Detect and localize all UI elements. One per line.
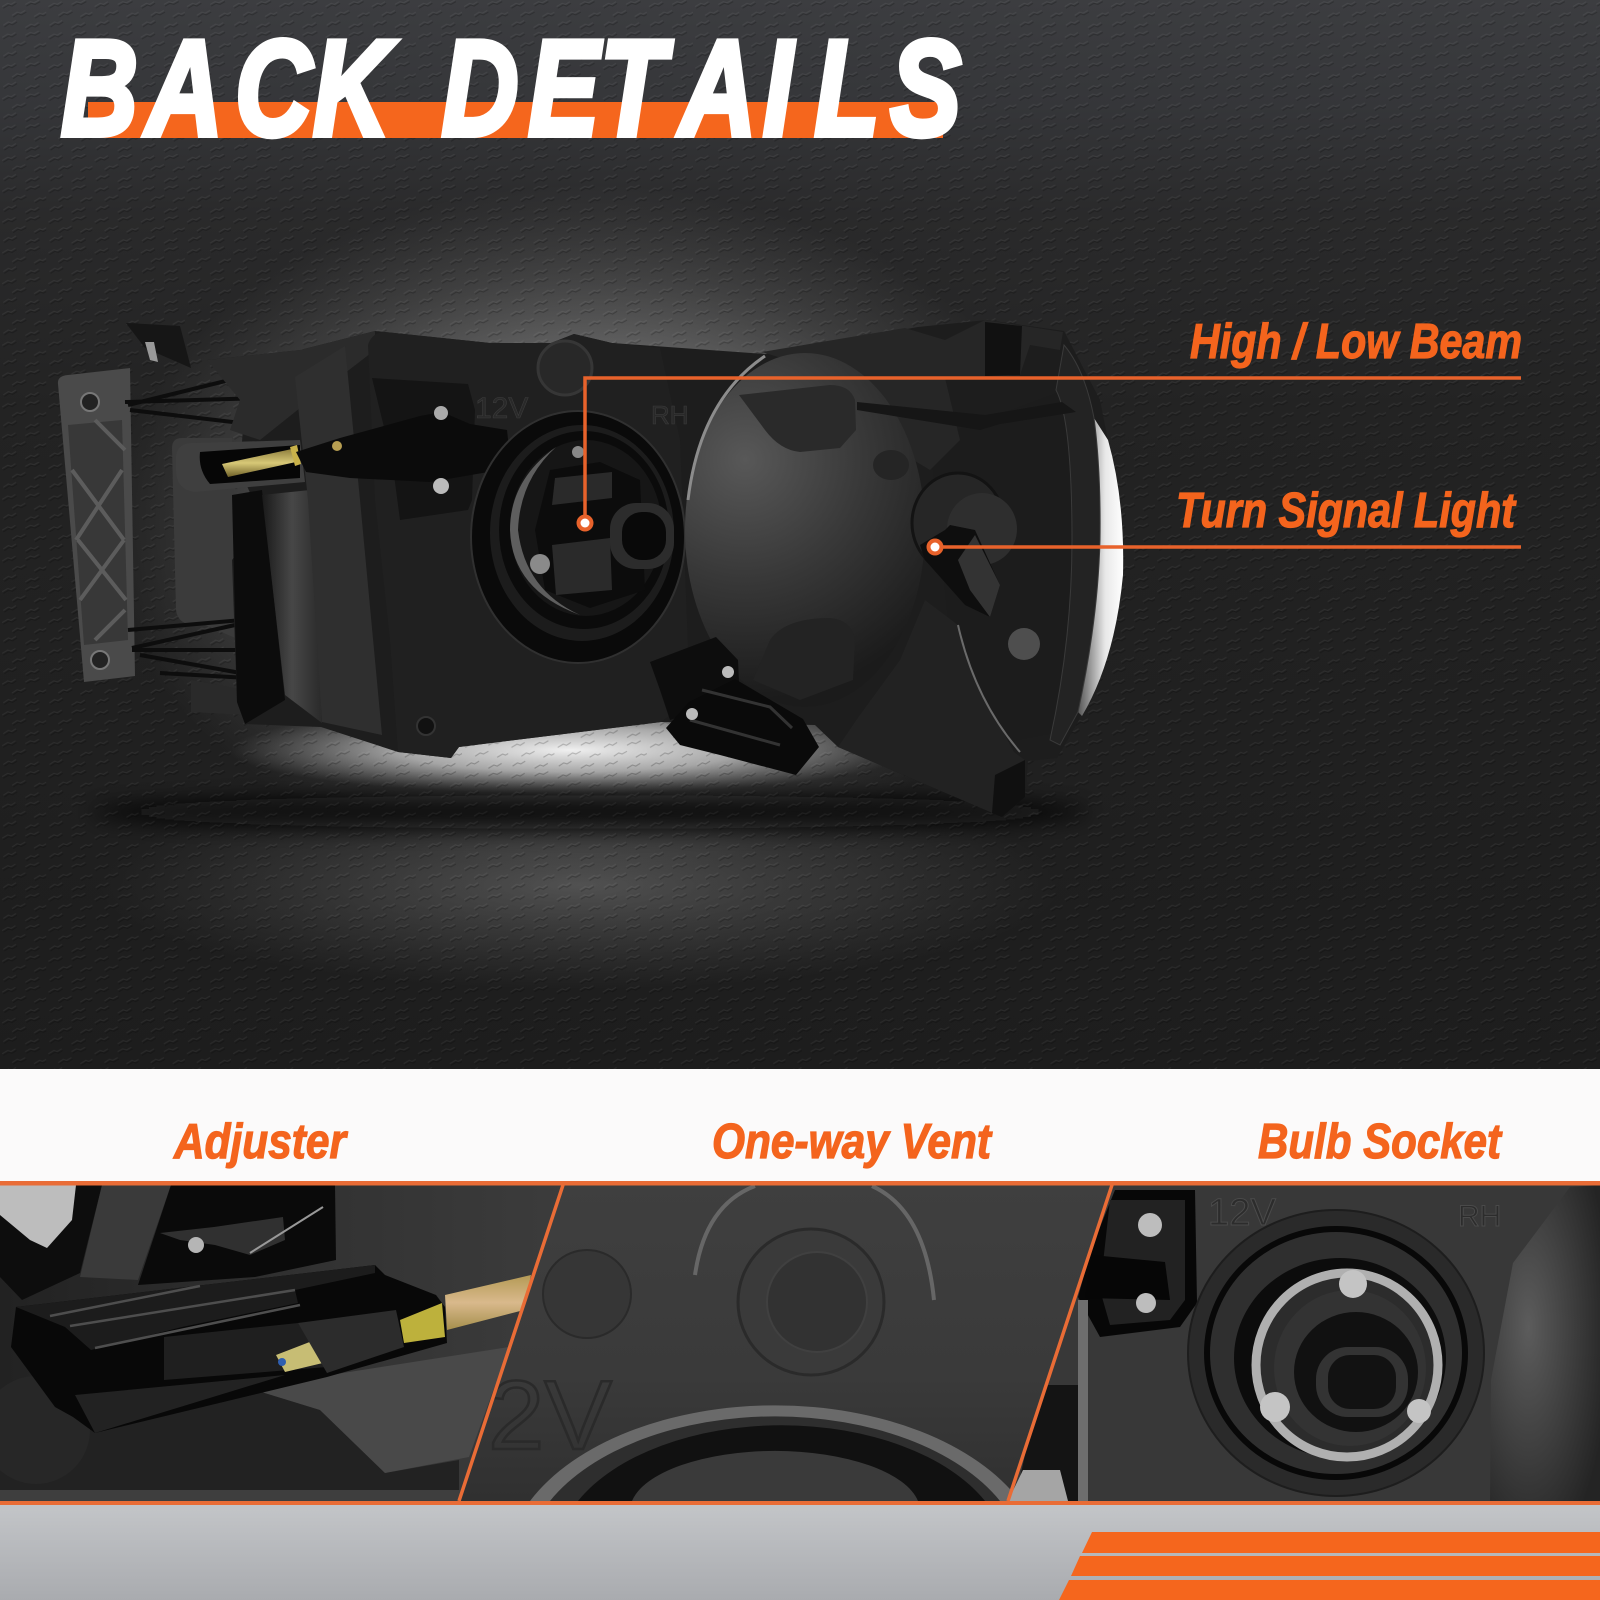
turn signal socket (912, 473, 1017, 617)
footer band (0, 1505, 1600, 1600)
headlamp back view (58, 320, 1123, 817)
vent circle (738, 1229, 884, 1375)
black cavity (138, 1185, 336, 1285)
lit lower surface (255, 1347, 509, 1473)
lower mount screw (417, 717, 435, 735)
gray collar (80, 1185, 171, 1280)
label: Adjuster: Adjuster (173, 1115, 349, 1169)
interior of corner lamp (930, 390, 1085, 745)
housing body (207, 320, 1123, 817)
lens glass (0, 1185, 76, 1248)
dome rim highlight (688, 356, 765, 500)
lens frame (1050, 345, 1100, 745)
callout: High / Low Beam (576, 315, 1522, 532)
title orange highlight bar (88, 102, 943, 138)
molded 12V mark: 12V (1208, 1192, 1277, 1234)
clip inner block (164, 1323, 327, 1380)
black clip (11, 1265, 447, 1433)
clip lower rail (75, 1375, 285, 1433)
top vent clip (762, 320, 1063, 470)
lower dark shell (162, 1392, 459, 1490)
label: Bulb Socket: Bulb Socket (1258, 1115, 1502, 1169)
side shaded panels (232, 490, 285, 724)
molded 2V mark: 2V (488, 1360, 612, 1470)
callout leader and dot (585, 378, 1521, 523)
small knob (873, 450, 909, 480)
molded RH mark: RH (1458, 1200, 1501, 1233)
label: One-way Vent: One-way Vent (712, 1115, 992, 1169)
panel: adjuster detail (0, 1185, 570, 1501)
orange divider strokes (0, 1181, 1600, 1506)
lever and screw (160, 1217, 285, 1255)
threaded collar (400, 1303, 445, 1343)
high / low beam socket (471, 411, 685, 663)
title: BACK DETAILS: BACK DETAILS (61, 12, 961, 164)
molded 12V mark: 12V (475, 392, 528, 425)
panel: vent detail (450, 1185, 1120, 1501)
adjuster with gold rod (176, 406, 510, 494)
textured strip (295, 346, 382, 735)
left latch box (1078, 1190, 1197, 1337)
molded arc (695, 1186, 934, 1300)
molded RH mark: RH (651, 400, 689, 430)
footer orange stripes (1059, 1532, 1600, 1600)
lower fairing (838, 600, 1025, 817)
gold threaded rod (445, 1275, 531, 1330)
lower socket rings (530, 1405, 1020, 1501)
lower ribs (1020, 1385, 1078, 1501)
top bump (739, 385, 856, 452)
reflector dome (685, 353, 925, 707)
lower harness connector (650, 637, 819, 775)
lower bump (753, 618, 855, 700)
lens edge (1078, 418, 1123, 716)
adjuster recess (372, 378, 475, 520)
dome edge (1490, 1185, 1600, 1501)
molded circle (0, 1376, 90, 1484)
gold tip (276, 1342, 322, 1372)
socket rings (1188, 1210, 1484, 1496)
grommet plug (1008, 628, 1040, 660)
callout: High / Low Beam: High / Low Beam (1190, 315, 1522, 369)
panel: bulb socket detail (1000, 1185, 1600, 1501)
clip top ridges (16, 1265, 375, 1350)
label band (0, 1069, 1600, 1181)
fairing tip (992, 760, 1025, 817)
socket housing box top (368, 332, 690, 758)
side circle (543, 1250, 631, 1338)
one-way vent circle (538, 341, 592, 395)
upper rear shoulder (207, 331, 375, 440)
wire (857, 402, 1076, 430)
background: dark textured panel (0, 0, 1600, 1069)
callout: Turn Signal Light: Turn Signal Light (1176, 484, 1516, 538)
callout: Turn Signal Light (926, 484, 1521, 556)
socket screws (1260, 1270, 1431, 1423)
mounting bracket (58, 323, 286, 715)
plastic sleeve (298, 1310, 404, 1373)
lens ring dark (0, 1185, 102, 1300)
